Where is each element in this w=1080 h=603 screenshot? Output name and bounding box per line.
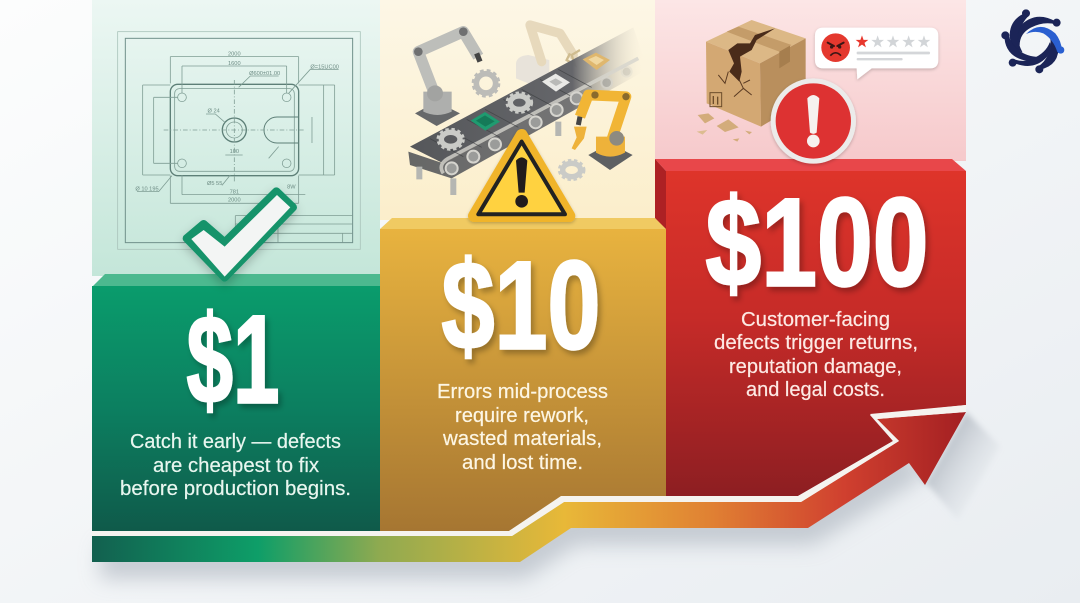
value: $1: $1 [186,290,280,430]
description: $1: Catch it early — defects [130,431,341,453]
arrow shadow [100,412,1000,562]
icon: warning triangle [474,135,569,216]
callout: one-star review bubble [815,28,938,79]
blueprint drawing: 100 [230,149,239,155]
description: $1: before production begins. [120,478,351,500]
value: $10: $10 [442,236,600,376]
logo [1002,10,1064,73]
parts on belt [438,53,610,180]
description: $100: reputation damage, [729,356,902,378]
growth arrow [92,405,966,562]
factory conveyor illustration [408,25,643,195]
blueprint drawing: Ø 24 [208,109,220,115]
blueprint drawing: Ø600±01.00 [249,71,280,77]
robot arm: beige [516,25,580,84]
description: $10: require rework, [455,405,589,427]
icon: green check mark [187,191,293,278]
conveyor belt [408,27,643,195]
blueprint drawing: Ø5 55 [207,181,222,187]
panel: customer stage background [655,0,966,161]
block: yellow $10 [380,218,667,531]
icon: cracked box [697,20,806,142]
description: $1: are cheapest to fix [153,455,319,477]
description: $100: defects trigger returns, [714,332,918,354]
icon: red exclamation alert [771,78,856,164]
value: $100: $100 [706,174,928,312]
panel: mid-process background [380,0,655,220]
star rating [856,35,930,47]
description: $1 [120,431,351,500]
robot arm: grey [414,27,499,126]
blueprint drawing: 781 [230,189,239,195]
description: $100: Customer-facing [741,309,890,331]
blueprint drawing: Ø=15UC00 [310,65,339,71]
description: $10 [437,381,608,474]
description: $100 [714,309,918,401]
blueprint drawing: 2000 [228,198,241,204]
blueprint drawing: 1600 [228,61,241,67]
blueprint drawing: Ø 10 195 [135,187,159,193]
description: $100: and legal costs. [746,379,885,401]
blueprint drawing [118,32,360,249]
block: red $100 [655,159,966,496]
robot arm: yellow [572,91,633,170]
icon: angry face [821,33,850,62]
panel: early stage background [92,0,380,276]
block: green $1 [92,274,380,531]
description: $10: wasted materials, [442,428,602,450]
description: $10: and lost time. [462,452,583,474]
blueprint drawing: 2000 [228,52,241,58]
blueprint drawing: 8W [287,185,296,191]
description: $10: Errors mid-process [437,381,608,403]
